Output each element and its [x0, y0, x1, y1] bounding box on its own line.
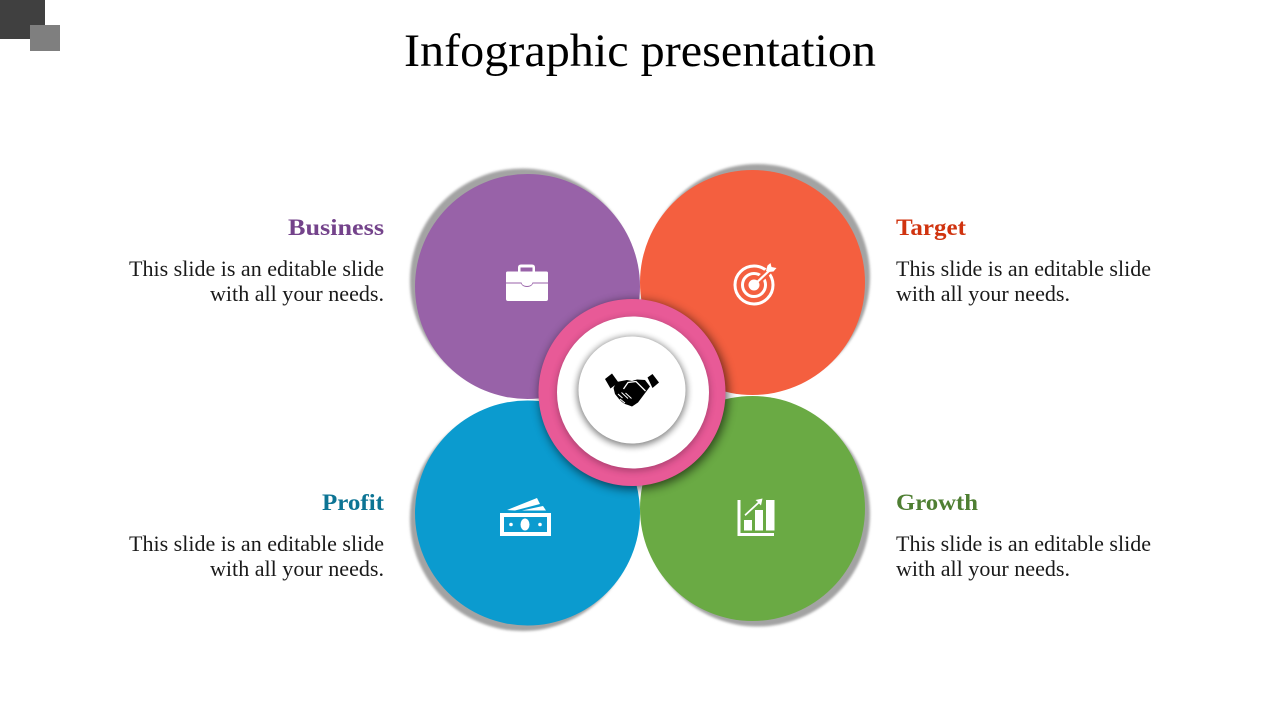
icon: target — [735, 263, 776, 304]
text block: target — [896, 215, 1151, 306]
text block: target: Target — [896, 215, 966, 240]
text block: profit: Profit — [322, 490, 384, 515]
panel: growth circle — [640, 396, 870, 626]
text block: profit — [129, 490, 384, 581]
text block: target: with all your needs. — [896, 281, 1070, 306]
text block: growth: with all your needs. — [896, 556, 1070, 581]
text block: target: This slide is an editable slide — [896, 256, 1151, 281]
text block: growth: This slide is an editable slide — [896, 531, 1151, 556]
icon: banknotes — [502, 498, 549, 534]
title: Infographic presentation — [404, 25, 876, 77]
text block: business: with all your needs. — [210, 281, 384, 306]
text block: profit: This slide is an editable slide — [129, 531, 384, 556]
corner decoration squares — [0, 0, 60, 51]
icon: handshake — [605, 374, 659, 406]
text block: business — [129, 215, 384, 306]
text block: business: This slide is an editable slide — [129, 256, 384, 281]
icon: briefcase — [506, 264, 548, 301]
panel: profit circle — [410, 400, 640, 631]
panel: target circle — [640, 164, 870, 395]
panel: business circle — [410, 168, 640, 399]
icon: bar chart — [738, 498, 774, 536]
central hub — [538, 299, 728, 489]
text block: growth — [896, 490, 1151, 581]
text block: growth: Growth — [896, 490, 978, 515]
text block: profit: with all your needs. — [210, 556, 384, 581]
text block: business: Business — [288, 215, 384, 240]
